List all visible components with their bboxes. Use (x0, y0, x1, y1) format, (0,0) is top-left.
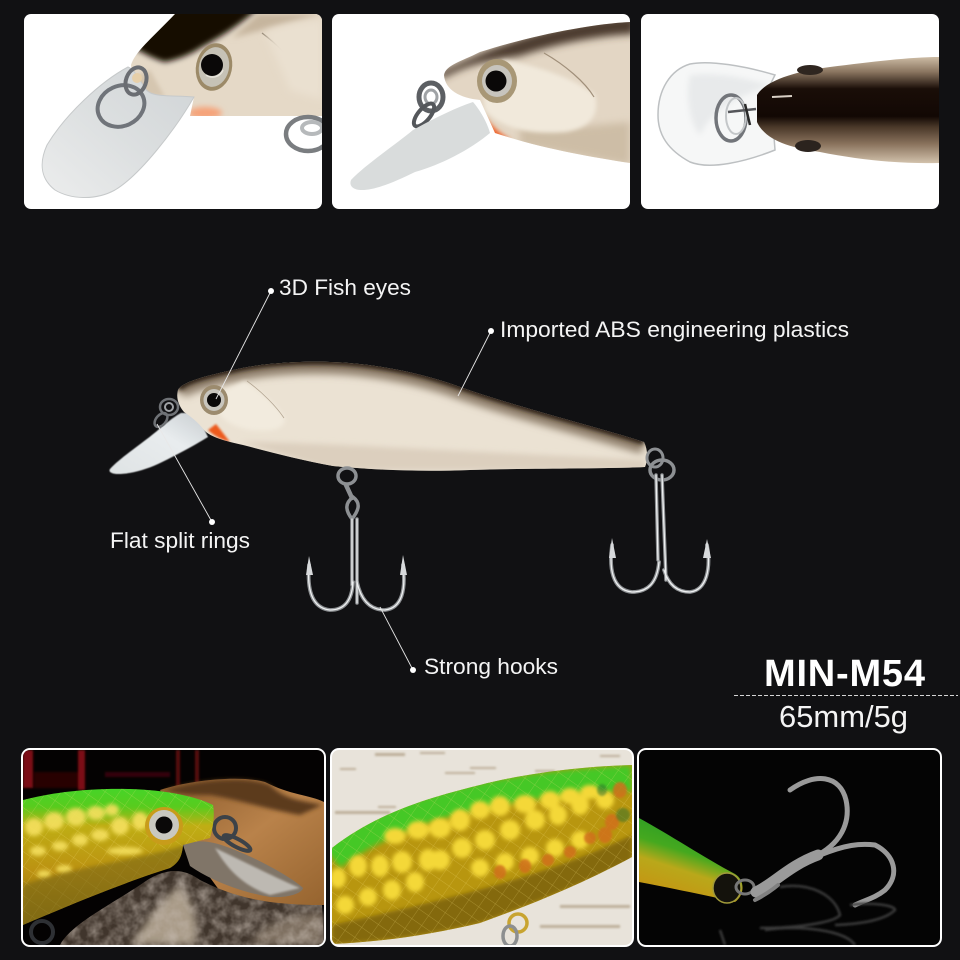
icon: rear ring (31, 921, 53, 943)
icon: belly treble hook (306, 468, 407, 610)
body top view (757, 57, 939, 163)
callout: Flat split rings (110, 424, 250, 553)
icon: ring (716, 95, 756, 141)
callout: 3D Fish eyes: 3D Fish eyes (279, 275, 411, 300)
callout: 3D Fish eyes (216, 275, 411, 399)
icon: eye ring (214, 817, 252, 854)
size and weight: 65mm/5g (779, 699, 908, 734)
icon: lip (42, 67, 194, 198)
callout: Strong hooks (380, 607, 558, 679)
icon: lip (350, 102, 490, 190)
icon: eye (196, 43, 232, 91)
panel: lip side close-up (332, 14, 635, 209)
model name: MIN-M54 (764, 653, 925, 695)
lure body (177, 362, 647, 471)
callout: Imported ABS engineering plastics: Imported ABS engineering plastics (500, 317, 849, 342)
panel: holographic scales close-up (330, 748, 634, 947)
icon: lure lip (109, 413, 208, 474)
icon: belly ring (503, 914, 527, 946)
leaf (160, 779, 324, 905)
reflection (720, 886, 895, 945)
icon: eye (477, 59, 517, 103)
callout: Imported ABS engineering plastics (458, 317, 849, 396)
panel: treble hook close-up (637, 748, 942, 947)
lure body (23, 789, 214, 925)
icon: eyes (797, 65, 823, 75)
icon: lure eye (200, 385, 228, 415)
icon: rings (410, 83, 443, 130)
callout: Strong hooks: Strong hooks (424, 654, 558, 679)
lure product image (109, 360, 711, 610)
panel: lip front close-up (24, 5, 330, 209)
icon: eye (145, 807, 183, 845)
panel: top view close-up (641, 14, 939, 209)
icon: rear ring (286, 117, 330, 151)
icon: front split rings (152, 399, 178, 429)
icon: split rings (96, 65, 149, 129)
rock (60, 871, 324, 945)
lip (183, 841, 303, 897)
icon: hook (736, 779, 894, 905)
icon: tail treble hook (609, 449, 711, 592)
panel: lure head on rock (21, 748, 326, 947)
icon: clear lip (658, 63, 775, 165)
callout: Flat split rings: Flat split rings (110, 528, 250, 553)
